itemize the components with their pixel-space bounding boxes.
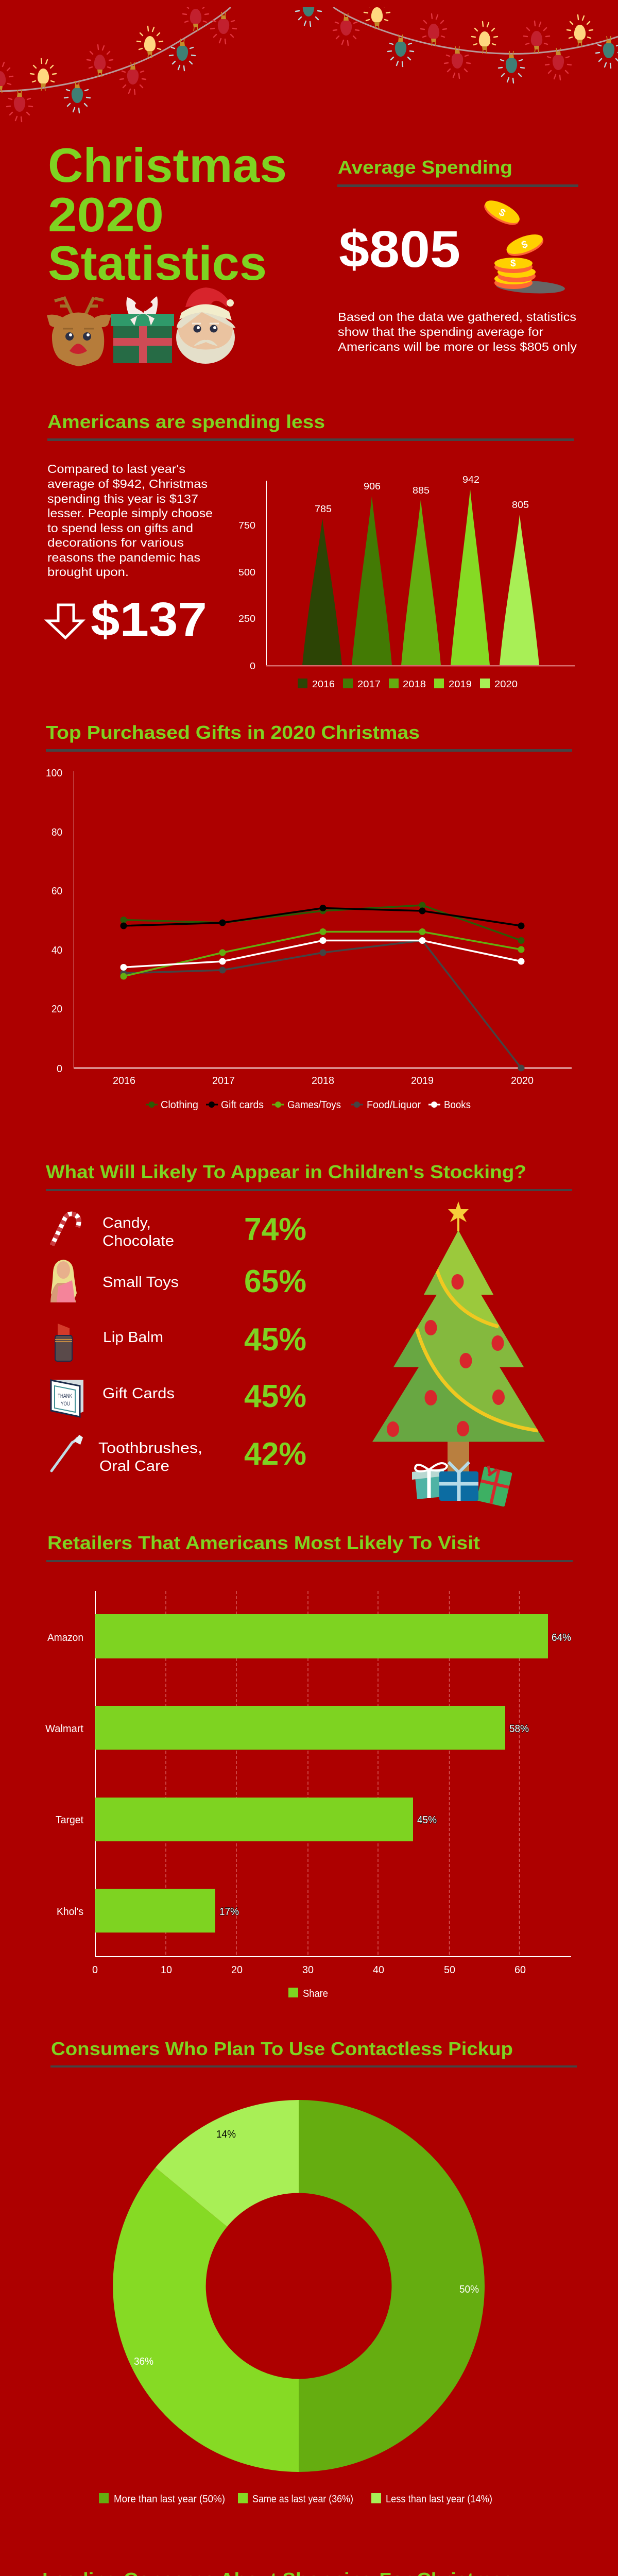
icon: gift box (111, 296, 174, 363)
tree ornaments (387, 1274, 505, 1437)
spike chart: average spending by year: 785 (315, 504, 332, 514)
chart legend: years (298, 679, 518, 689)
line chart: top purchased gifts: 20 (52, 1004, 62, 1015)
legend: share (288, 1988, 328, 1999)
spike chart: average spending by year: 750 (238, 520, 255, 531)
text: spending explanation (338, 310, 577, 353)
value labels (219, 1632, 571, 1918)
bars (95, 1614, 548, 1933)
legend: donut chart (99, 2493, 492, 2505)
legend: donut chart: Same as last year (36%) (252, 2494, 353, 2505)
icon: thank you card: THANK (58, 1393, 72, 1399)
donut chart: contactless pickup: 36% (134, 2356, 153, 2367)
series: gift cards (121, 905, 524, 929)
spike chart: average spending by year: 885 (413, 485, 430, 496)
series: books (121, 938, 524, 971)
x axis ticks: 50 (444, 1964, 455, 1976)
icon: toothbrush (52, 1435, 83, 1471)
icon: falling coins (481, 196, 565, 295)
stocking item: gift cards: 45% (244, 1379, 306, 1414)
stocking item: lip balm (103, 1322, 306, 1358)
chart legend: gift categories: Gift cards (221, 1099, 264, 1111)
icon: lipstick (55, 1324, 72, 1361)
donut chart: contactless pickup (113, 2100, 485, 2472)
illustration: christmas tree (372, 1201, 545, 1506)
value labels: 58% (509, 1723, 529, 1735)
chart legend: years: 2019 (449, 679, 472, 689)
stocking item: small toys: 65% (244, 1264, 306, 1299)
text: spending explanation: show that the spending average for (338, 325, 543, 338)
title: Christmas (48, 138, 287, 192)
line chart: top purchased gifts: 80 (52, 827, 62, 838)
value labels: 64% (552, 1632, 571, 1643)
icon: thank you card: YOU (61, 1401, 70, 1407)
category labels (45, 1632, 83, 1918)
heading: top purchased gifts: Top Purchased Gifts in 2020 Christmas (46, 722, 420, 743)
line chart: top purchased gifts: 0 (57, 1063, 62, 1075)
series: games and toys (121, 928, 524, 979)
category labels: Khol's (57, 1906, 83, 1918)
stocking item: toothbrushes (98, 1436, 306, 1475)
x axis ticks: 30 (302, 1964, 314, 1976)
chart legend: gift categories: Clothing (161, 1099, 198, 1111)
stocking item: lip balm: Lip Balm (103, 1329, 163, 1346)
bar chart: retailers (45, 1591, 571, 1999)
title: Statistics (48, 236, 267, 290)
icon: thank you card (51, 1380, 83, 1417)
heading: children's stocking (46, 1161, 572, 1191)
stocking item: small toys: Small Toys (102, 1274, 179, 1291)
chart legend: years: 2020 (494, 679, 518, 689)
spike chart: average spending by year: 906 (364, 481, 381, 492)
x axis ticks: 20 (231, 1964, 243, 1976)
stocking item: gift cards: Gift Cards (102, 1385, 175, 1402)
heading: retailers (46, 1532, 573, 1562)
x axis ticks (92, 1964, 526, 1976)
stocking item: candy: 74% (244, 1212, 306, 1247)
x axis ticks: 60 (514, 1964, 526, 1976)
x axis ticks: 10 (161, 1964, 172, 1976)
stocking item: toothbrushes: 42% (244, 1436, 306, 1472)
heading: contactless pickup: Consumers Who Plan To Use Contactless Pickup (51, 2038, 513, 2059)
spike chart: average spending by year: 0 (250, 661, 255, 671)
spike chart: average spending by year: 250 (238, 614, 255, 624)
big number: $137: $137 (91, 592, 207, 646)
spike chart: average spending by year (238, 474, 575, 689)
chart legend: years: 2016 (312, 679, 335, 689)
line chart: top purchased gifts: 2018 (312, 1075, 334, 1087)
icon: santa (176, 287, 235, 364)
heading: children's stocking: What Will Likely To Appear in Children's Stocking? (46, 1161, 526, 1182)
icon: falling coins: $ (510, 258, 516, 269)
chart legend: gift categories: Books (444, 1099, 471, 1111)
line chart: top purchased gifts: 2017 (212, 1075, 235, 1087)
line chart: top purchased gifts: 100 (46, 768, 62, 779)
line chart: top purchased gifts: 2019 (411, 1075, 434, 1087)
title: 2020 (48, 188, 164, 242)
text: spending comparison: to spend less on gifts and (47, 521, 193, 535)
icon: candy cane (52, 1214, 79, 1245)
heading: spending less (47, 411, 574, 441)
text: spending comparison: decorations for various (47, 536, 184, 549)
text: spending explanation: Americans will be more or less $805 only (338, 340, 577, 353)
spike chart: average spending by year: 805 (512, 500, 529, 510)
spike chart: average spending by year: 500 (238, 567, 255, 578)
text: spending comparison: brought upon. (47, 565, 129, 579)
heading: top purchased gifts (46, 722, 572, 752)
series: food and liquor (121, 938, 524, 1071)
donut chart: contactless pickup: 50% (459, 2284, 479, 2295)
icon: falling coins: $ (497, 207, 507, 219)
line chart: top purchased gifts (46, 768, 572, 1111)
chart legend: gift categories: Games/Toys (287, 1099, 341, 1111)
x axis ticks: 0 (92, 1964, 98, 1976)
text: spending explanation: Based on the data we gathered, statistics (338, 310, 576, 324)
stocking item: toothbrushes: Oral Care (99, 1458, 169, 1475)
text: spending comparison: average of $942, Christmas (47, 477, 208, 490)
text: spending comparison: spending this year is $137 (47, 492, 198, 505)
category labels: Target (56, 1815, 83, 1826)
big number: $805: $805 (339, 221, 460, 278)
x axis ticks: 40 (373, 1964, 384, 1976)
chart legend: years: 2018 (403, 679, 426, 689)
category labels: Amazon (47, 1632, 83, 1643)
icon: doll (50, 1260, 77, 1302)
value labels: 17% (219, 1906, 239, 1918)
category labels: Walmart (45, 1723, 83, 1735)
heading: average spending: Average Spending (338, 157, 512, 178)
stocking item: lip balm: 45% (244, 1322, 306, 1358)
chart legend: gift categories (146, 1099, 471, 1111)
title (48, 138, 287, 290)
string lights (0, 0, 618, 122)
text: spending comparison (47, 462, 213, 579)
icon: falling coins: $ (520, 239, 529, 251)
legend: share: Share (303, 1988, 328, 1999)
stocking item: candy (102, 1212, 306, 1249)
stocking item: small toys (102, 1264, 306, 1299)
text: spending comparison: Compared to last year's (47, 462, 185, 476)
legend: donut chart: Less than last year (14%) (386, 2494, 492, 2505)
line chart: top purchased gifts: 60 (52, 886, 62, 897)
value labels: 45% (417, 1815, 437, 1826)
stocking item: gift cards (102, 1379, 306, 1414)
icon: down arrow (47, 605, 82, 638)
stocking item: candy: Candy, (102, 1215, 151, 1231)
chart legend: years: 2017 (357, 679, 381, 689)
line chart: top purchased gifts: 2016 (113, 1075, 135, 1087)
heading: spending less: Americans are spending less (47, 411, 325, 432)
icon: reindeer (47, 297, 111, 366)
text: spending comparison: lesser. People simply choose (47, 506, 213, 520)
line chart: top purchased gifts: 40 (52, 945, 62, 956)
donut chart: contactless pickup: 14% (216, 2129, 236, 2140)
stocking item: candy: Chocolate (102, 1233, 174, 1249)
stocking item: toothbrushes: Toothbrushes, (98, 1440, 202, 1456)
heading: contactless pickup (50, 2038, 577, 2067)
series: clothing (121, 902, 524, 944)
legend: donut chart: More than last year (50%) (114, 2494, 225, 2505)
presents under tree (412, 1462, 512, 1507)
chart legend: gift categories: Food/Liquor (367, 1099, 421, 1111)
spike chart: average spending by year: 942 (462, 474, 479, 485)
heading: retailers: Retailers That Americans Most Likely To Visit (47, 1532, 480, 1553)
text: spending comparison: reasons the pandemic has (47, 551, 200, 564)
line chart: top purchased gifts: 2020 (511, 1075, 534, 1087)
tree star (448, 1201, 469, 1231)
heading: average spending (337, 157, 578, 187)
